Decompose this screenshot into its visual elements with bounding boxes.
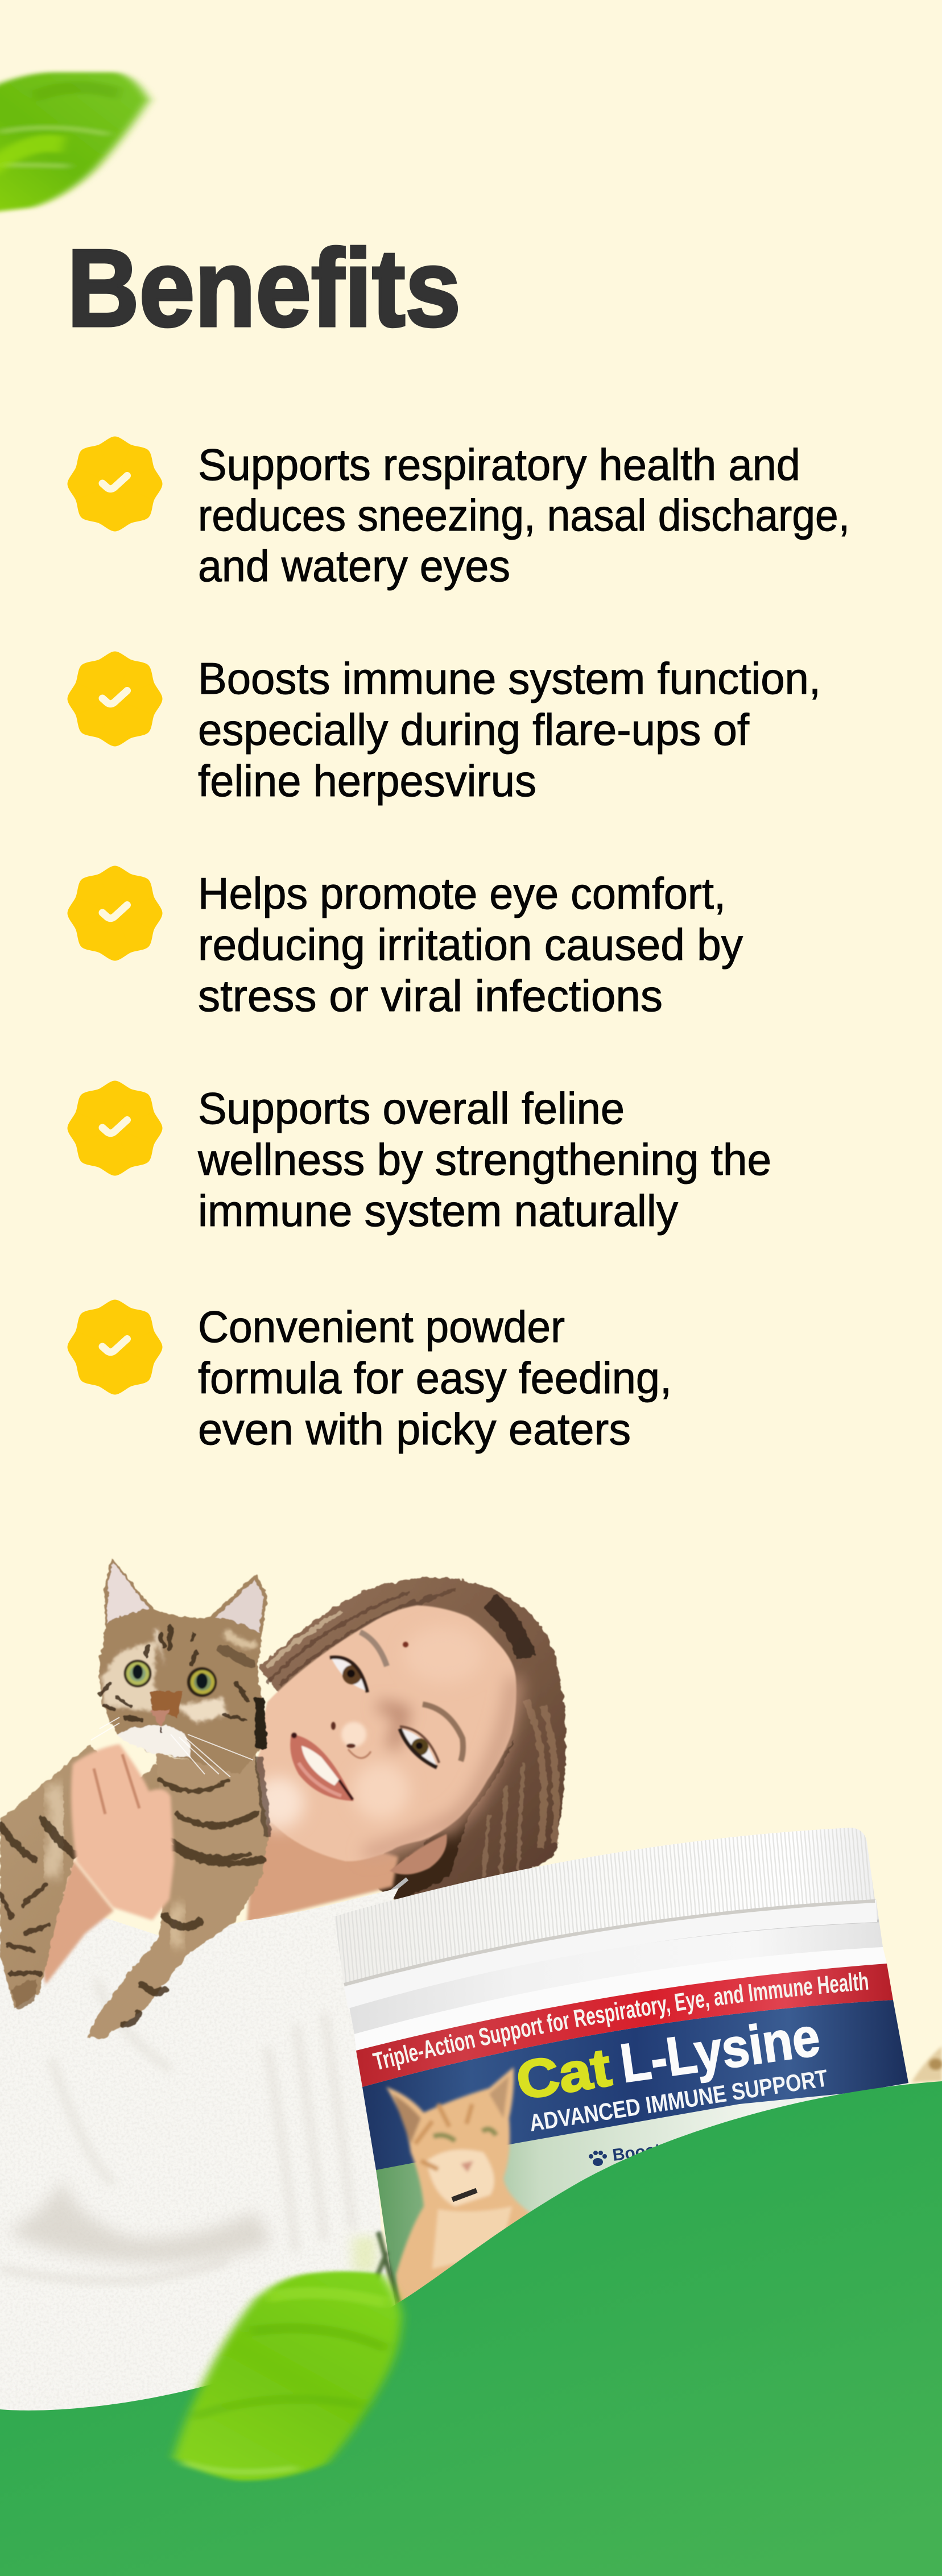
benefit 3 text: stress or viral infections: [198, 971, 663, 1021]
teeth: [301, 1746, 339, 1786]
mole: [403, 1642, 408, 1647]
nose: [341, 1722, 366, 1747]
cat ears: [107, 1563, 149, 1624]
icon: check badge: [68, 1081, 162, 1175]
benefit 4 text: wellness by strengthening the: [197, 1134, 771, 1185]
icon: check badge: [68, 866, 162, 960]
cat body: [0, 1740, 268, 2038]
product name: Cat: [513, 2037, 615, 2111]
jar neck line: [348, 1921, 879, 2002]
benefit 1: [68, 437, 850, 591]
woman lower arm: [40, 1859, 114, 1985]
benefit 1 text: Supports respiratory health and: [198, 440, 800, 490]
brows: [360, 1632, 387, 1666]
benefit 1 text: and watery eyes: [198, 541, 510, 591]
woman hand: [71, 1744, 174, 1920]
cat collar: [452, 2190, 477, 2200]
lid: [330, 1820, 882, 2008]
benefit 1 text: reduces sneezing, nasal discharge,: [198, 490, 850, 540]
benefit 2 text: especially during flare-ups of: [198, 705, 749, 755]
small tan decoration at right: [911, 2046, 942, 2082]
woman face: [250, 1605, 517, 1874]
jar body: [344, 1899, 922, 2331]
benefit 3: [68, 866, 743, 1021]
lips: [290, 1734, 354, 1801]
woman earring: [389, 1879, 407, 1894]
product name: ADVANCED IMMUNE SUPPORT: [527, 2064, 830, 2136]
product jar: [336, 1828, 908, 2304]
cat whiskers: [91, 1717, 253, 1777]
benefit 3 text: [198, 868, 743, 1021]
woman ear: [390, 1834, 447, 1874]
title: Benefits: [67, 226, 461, 349]
cat muzzle: [117, 1725, 191, 1757]
benefit 2: [68, 652, 821, 806]
benefit 5: [68, 1300, 672, 1454]
cat head: [98, 1558, 267, 1774]
icon: top-left green leaf: [0, 72, 149, 215]
left eye: [332, 1659, 366, 1691]
icon: check badge: [68, 652, 162, 746]
tan detail: [929, 2059, 942, 2070]
woman neck: [247, 1820, 398, 1923]
woman features: [290, 1632, 463, 1801]
benefit 4 text: immune system naturally: [198, 1186, 678, 1236]
cat face light areas: [101, 1626, 256, 1723]
product name: [513, 2006, 830, 2165]
hand finger shadows: [94, 1754, 139, 1814]
label cat photo: [386, 2067, 540, 2309]
benefit 3 text: Helps promote eye comfort,: [198, 868, 726, 918]
benefit 4 text: Supports overall feline: [198, 1083, 625, 1133]
product name: Boost Im: [612, 2138, 686, 2165]
icon: check badge: [68, 437, 162, 531]
cat eyes: [124, 1660, 217, 1697]
benefit 2 text: [198, 653, 821, 806]
benefit 5 text: even with picky eaters: [198, 1404, 631, 1454]
icon: lower green leaf: [173, 2237, 402, 2480]
icon: check badge: [68, 1300, 162, 1394]
benefit 5 text: [198, 1302, 672, 1454]
benefit 4 text: [197, 1083, 771, 1236]
green wave: [0, 2081, 942, 2576]
cat stripes: [0, 1780, 262, 2024]
woman hair: [259, 1577, 566, 1902]
benefit 5 text: Convenient powder: [198, 1302, 565, 1352]
benefit 2 text: Boosts immune system function,: [198, 653, 821, 703]
plant sprig: [375, 2232, 398, 2303]
benefit 4: [68, 1081, 771, 1236]
product name: L-Lysine: [617, 2006, 823, 2094]
jar shoulder: [354, 1947, 887, 2051]
label blue band: [362, 2000, 908, 2170]
cat markings: [100, 1626, 250, 1720]
benefit 2 text: feline herpesvirus: [198, 756, 536, 806]
benefit 1 text: [198, 440, 850, 591]
white sweater: [0, 1888, 399, 2422]
illustration: woman holding cat: [0, 1558, 566, 2422]
face shading: [253, 1626, 515, 1854]
label background: [376, 2081, 922, 2309]
paw icon: [589, 2151, 607, 2166]
benefit 5 text: formula for easy feeding,: [198, 1353, 672, 1403]
benefit 3 text: reducing irritation caused by: [198, 920, 743, 970]
label red band: Triple-Action Support for Respiratory, Eye, and Immune Health: [372, 1972, 868, 2070]
right eye: [400, 1729, 437, 1767]
